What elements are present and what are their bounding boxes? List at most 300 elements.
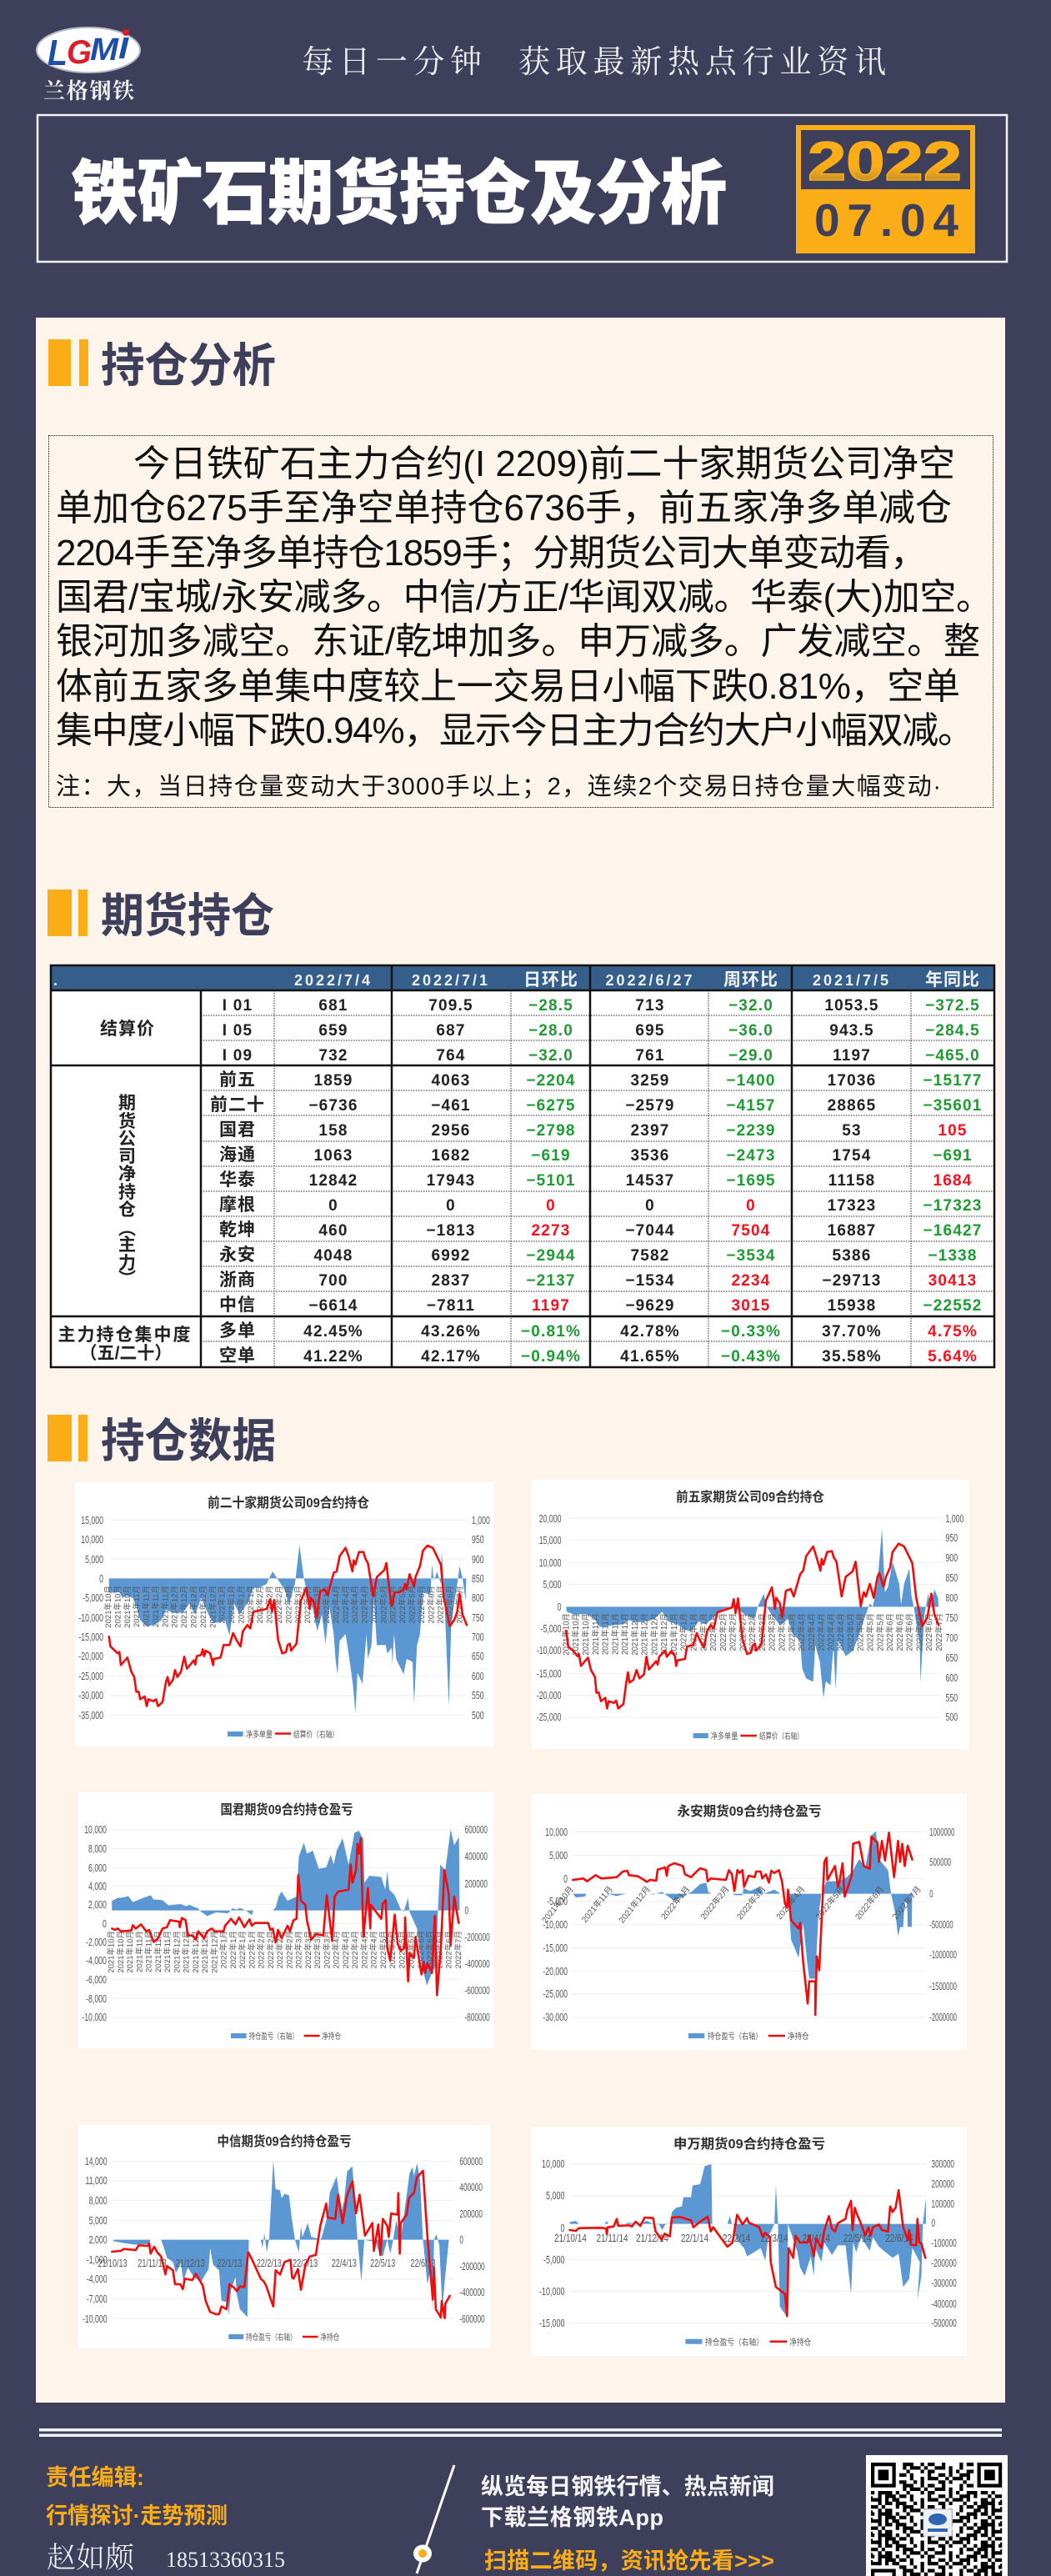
date axis labels: 22/6/13 [411,2258,435,2269]
date axis labels: 2021年12月 [649,1613,659,1656]
row 华泰: 11158 [828,1172,875,1190]
row 中信: 中信 [219,1296,256,1315]
row 乾坤 [219,1220,983,1240]
row 中信: −22552 [923,1297,983,1315]
date axis labels: 2022年5月 [813,1884,847,1922]
footer: app download text [481,2474,774,2573]
date axis labels: 2021年12月 [616,1884,653,1925]
right axis labels: 950 [472,1535,484,1546]
chart title: 永安期货09合约持仓盈亏 [677,1803,822,1819]
date axis labels: 2021年12月 [188,1586,198,1628]
date axis labels: 2021年12月 [200,1931,210,1973]
date axis labels: 2021年12月 [191,1931,201,1973]
table header: 2022/7/1 [412,972,490,989]
right axis labels: 750 [472,1613,484,1624]
row 空单: 35.58% [822,1348,882,1366]
left axis labels: 0 [563,1874,568,1885]
date badge [796,125,975,253]
row 多单: 43.26% [421,1323,481,1341]
left axis labels: -8,000 [86,1994,107,2005]
row 浙商: −1534 [625,1272,675,1290]
left axis labels: -10,000 [539,2287,565,2298]
right axis labels: 200000 [459,2208,483,2221]
row 空单: −0.43% [721,1348,781,1366]
left axis labels: 5,000 [89,2216,108,2227]
legend [685,2337,811,2348]
row I 09: 761 [635,1047,665,1065]
right axis labels: -2000000 [929,2012,957,2024]
date axis labels: 2022年5月 [398,1586,408,1623]
row 永安: −2944 [526,1247,576,1265]
legend [228,2332,339,2343]
footer: app download text: 下载兰格钢铁App [481,2505,663,2530]
date axis labels: 2022年4月 [836,1613,846,1651]
right axis labels [929,1827,957,2024]
left axis labels: -5,000 [543,2255,565,2266]
row 摩根: 0 [328,1197,338,1215]
right axis labels: 600000 [459,2156,483,2168]
logo: LGMI 兰格钢铁: 兰格钢铁 [43,74,134,105]
row I 09: −32.0 [528,1047,573,1065]
area: 持仓盈亏 [570,2164,926,2316]
legend [688,2031,809,2042]
date axis labels: 2021年12月 [209,1931,219,1973]
line: 净持仓 [112,2171,450,2318]
right axis labels: 400000 [459,2182,483,2194]
date axis labels: 2022年2月 [275,1931,285,1968]
date axis labels: 2022年3月 [293,1586,303,1623]
slogan [302,36,886,82]
right axis labels [932,2158,957,2330]
right axis labels: -200000 [459,2261,485,2273]
left axis labels: -10,000 [83,2314,108,2325]
left axis labels: 10,000 [81,1535,103,1546]
table header: 年同比 [925,970,980,990]
left axis labels: 10,000 [84,1825,107,1836]
row I 05: −36.0 [728,1022,773,1040]
table header: 2021/7/5 [813,972,891,989]
right axis labels: 500 [472,1711,484,1722]
right axis labels: 800 [945,1593,958,1604]
date axis labels: 2022年4月 [807,1613,817,1651]
left axis labels: -25,000 [78,1671,103,1682]
row 摩根: −17323 [923,1197,983,1215]
left axis labels: -20,000 [543,1967,568,1977]
legend [228,1729,338,1740]
row 多单: −0.33% [721,1323,781,1341]
area: 持仓盈亏 [112,1829,459,1986]
right axis labels [459,2156,485,2326]
date axis labels: 2022年1月 [227,1586,237,1623]
right axis labels: 800 [472,1593,484,1604]
date axis labels: 2022年4月 [826,1613,836,1651]
row 中信: 15938 [828,1297,876,1315]
left axis labels: -5,000 [547,1897,568,1907]
left axis labels: 2,000 [89,2235,108,2246]
left axis labels: -5,000 [541,1624,562,1635]
line: 结算价 [109,1546,467,1706]
date axis labels: 21/12/13 [176,2258,205,2269]
left axis labels: 5,000 [543,1580,562,1591]
date axis labels: 2022年3月 [322,1931,332,1968]
date axis labels: 2022年2月 [718,1613,728,1651]
row 乾坤: −16427 [923,1222,983,1240]
date axis labels: 2021年11月 [144,1931,154,1972]
date axis labels: 2022年4月 [797,1613,807,1651]
date axis labels: 2022年6月 [426,1586,436,1623]
row 乾坤: 2273 [531,1222,571,1240]
row 海通 [219,1145,973,1165]
date axis labels: 2022年3月 [777,1613,788,1651]
row I 09: I 09 [223,1047,253,1065]
left axis labels: -10,000 [78,1613,103,1624]
legend: 净持仓 [320,2332,339,2343]
row 永安: 7582 [630,1247,670,1265]
row 浙商 [219,1270,977,1290]
date axis labels: 22/4/13 [332,2258,357,2269]
row I 05: −284.5 [925,1022,980,1040]
left axis labels: 4,000 [88,1882,107,1892]
analysis text block [48,435,993,807]
logo: LGMI 兰格钢铁: L [48,33,68,73]
date axis labels: 2022年4月 [350,1931,360,1968]
date axis labels: 2022年6月 [435,1931,444,1968]
row 中信: −7811 [427,1297,475,1315]
date axis labels: 2022年6月 [445,1586,455,1623]
date axis labels: 2021年11月 [132,1586,142,1627]
date axis labels: 2021年10月 [539,1884,576,1925]
legend: 结算价（右轴） [293,1729,338,1740]
row I 01: 713 [635,997,665,1015]
footer: editor info [46,2465,285,2576]
left axis labels: -10,000 [537,1646,562,1656]
row I 05: 943.5 [829,1022,874,1040]
right axis labels: 850 [472,1574,484,1585]
date axis labels: 2022年3月 [758,1613,768,1651]
date axis labels: 22/2/13 [257,2258,282,2269]
row 国君: 53 [842,1122,862,1140]
date axis labels: 2022年6月 [416,1931,426,1968]
row 前五: 4063 [431,1072,471,1090]
date axis labels: 2022年4月 [341,1586,351,1623]
row 中信: −6614 [308,1297,358,1315]
date axis labels: 2022年2月 [738,1613,748,1651]
legend: 持仓盈亏（右轴） [246,2332,297,2343]
date axis labels: 22/5/14 [843,2233,871,2244]
row I 01: I 01 [223,997,253,1015]
left axis labels: -4,000 [86,1956,107,1967]
left axis labels: -35,000 [78,1711,103,1722]
row 乾坤: 乾坤 [219,1220,256,1240]
date axis labels: 2022年1月 [247,1931,257,1968]
row 摩根: 0 [446,1197,456,1215]
table header: . [53,972,60,989]
legend: 持仓盈亏（右轴） [708,2031,762,2042]
table header: 2022/7/4 [294,972,373,989]
row group label: 期货公司净持仓（主力）: 主 [118,1235,137,1255]
main title: 铁矿石期货持仓及分析 [72,154,727,233]
date axis labels: 2021年11月 [610,1613,620,1655]
row 华泰: 华泰 [219,1170,256,1190]
date axis labels: 2021年12月 [659,1613,669,1656]
analysis text block: 今日铁矿石主力合约(I 2209)前二十家期货公司净空 [133,444,955,484]
date axis labels: 2021年10月 [116,1931,126,1973]
right axis labels: -300000 [932,2278,957,2290]
row 浙商: 2234 [731,1272,771,1290]
analysis text block: 单加仓6275手至净空单持仓6736手，前五家净多单减仓 [56,488,952,529]
right axis labels: 1,000 [472,1516,490,1526]
table header: 周环比 [723,970,778,990]
row 永安: 4048 [313,1247,353,1265]
date axis labels: 2022年4月 [369,1586,379,1623]
right axis labels: -1000000 [929,1950,957,1962]
date badge: 07.04 [814,194,958,246]
left axis labels: -25,000 [543,1989,568,2000]
row 前二十: −6275 [526,1097,576,1115]
date axis labels: 21/11/14 [596,2233,628,2244]
row 前五: 1859 [313,1072,353,1090]
date axis labels: 2022年6月 [444,1931,454,1968]
right axis labels: 550 [472,1691,484,1701]
right axis labels: -200000 [932,2258,957,2270]
date axis labels: 2022年1月 [219,1931,229,1968]
row 空单: 41.65% [620,1348,680,1366]
left axis labels: -15,000 [537,1669,562,1680]
date axis labels [539,1884,923,1925]
legend: 净持仓 [322,2031,341,2042]
date axis labels: 2022年4月 [359,1931,369,1968]
date axis labels: 2022年5月 [388,1931,398,1968]
row 多单: −0.81% [521,1323,581,1341]
legend: 净持仓 [788,2031,809,2042]
date axis labels: 2022年1月 [708,1613,718,1651]
left axis labels: -15,000 [78,1632,103,1643]
row I 01 [223,997,980,1015]
left axis labels: -30,000 [543,2012,568,2023]
date axis labels: 2022年6月 [895,1613,905,1651]
row I 09 [223,1047,980,1065]
left axis labels: -20,000 [537,1691,562,1701]
date axis labels: 2022年2月 [283,1586,293,1623]
row group label: 主力持仓集中度 [58,1326,192,1363]
date axis labels: 22/3/14 [760,2233,788,2244]
area: 净多单量 [109,1545,466,1713]
date axis labels: 2022年2月 [265,1586,275,1623]
row 前二十: 28865 [828,1097,876,1115]
row group label: 期货公司净持仓（主力）: 持 [118,1183,137,1202]
left axis labels: 8,000 [88,1844,107,1855]
date axis labels: 2022年2月 [698,1884,732,1922]
date axis labels: 2022年1月 [218,1586,228,1623]
legend [693,1731,803,1742]
legend: 持仓盈亏（右轴） [705,2337,763,2348]
date axis labels [554,2233,913,2244]
analysis text block: 体前五家多单集中度较上一交易日小幅下跌0.81%，空单 [56,666,960,707]
row 浙商: −2137 [526,1272,576,1290]
row group label: 期货公司净持仓（主力）: ︶ [118,1270,137,1289]
date axis labels: 2022年4月 [817,1613,827,1651]
row 前二十: −461 [431,1097,471,1115]
row 多单: 多单 [219,1321,256,1341]
date axis labels: 22/1/13 [217,2258,242,2269]
date axis labels: 2022年6月 [436,1586,446,1623]
right axis labels: 600 [945,1673,958,1684]
row 空单 [219,1346,978,1366]
right axis labels: -200000 [465,1932,490,1944]
row 华泰: 17943 [427,1172,475,1190]
main cream panel [36,318,1005,2403]
date axis labels: 2022年6月 [924,1613,934,1651]
left axis labels: -10,000 [82,2012,107,2023]
icon: slash divider with dot [413,2465,454,2573]
left axis labels: -15,000 [543,1943,568,1954]
note: 注：大，当日持仓量变动大于3000手以上；2，连续2个交易日持仓量大幅变动· [56,773,941,800]
date axis labels: 2021年11月 [142,1586,152,1627]
date axis labels [107,1931,463,1973]
footer: editor info: 赵如颇 [47,2535,135,2576]
row 国君: 105 [938,1122,968,1140]
date axis labels: 2021年12月 [198,1586,208,1628]
row I 01: 1053.5 [824,997,879,1015]
date axis labels: 2021年11月 [620,1613,630,1655]
right axis labels: 1000000 [929,1827,955,1839]
row group label: 期货公司净持仓（主力）: 司 [118,1147,137,1166]
area: 持仓盈亏 [113,2161,449,2317]
right axis labels: 700 [472,1632,484,1643]
row group label: 主力持仓集中度: 主力持仓集中度 [58,1326,192,1345]
row 国君: 国君 [219,1120,256,1140]
date axis labels: 2022年3月 [313,1586,323,1623]
left axis labels [537,1514,562,1723]
date axis labels: 2021年11月 [163,1931,173,1972]
date axis labels: 2022年4月 [773,1884,808,1922]
date axis labels [98,2258,435,2269]
legend [231,2031,341,2042]
heading: 持仓数据: 持仓数据 [101,1415,276,1467]
date axis labels: 2022年5月 [407,1586,417,1623]
row 中信: 1197 [532,1297,570,1315]
right axis labels: 900 [472,1555,484,1566]
chart: 前二十家期货公司09合约持仓 [75,1482,493,1747]
row 多单: 37.70% [822,1323,882,1341]
icon: QR centre logo [923,2509,952,2536]
date axis labels: 2022年2月 [728,1613,738,1651]
futures positions table [51,965,994,1367]
logo: LGMI 兰格钢铁: M [90,33,119,68]
date axis labels: 22/4/14 [803,2233,830,2244]
date axis labels: 2022年2月 [255,1586,265,1623]
row 浙商: −29713 [822,1272,882,1290]
date axis labels: 2021年12月 [170,1586,180,1628]
title box [38,115,1007,262]
date axis labels: 2021年11月 [591,1613,601,1655]
heading: 持仓分析: 持仓分析 [101,339,276,392]
date axis labels: 2022年1月 [688,1613,699,1651]
left axis labels: 0 [103,1919,107,1930]
footer: editor info: 责任编辑: [46,2465,144,2490]
date axis labels: 2021年12月 [172,1931,182,1973]
row group label: 期货公司净持仓（主力）: 力 [118,1254,137,1273]
date axis labels: 2022年6月 [914,1613,924,1651]
date axis labels: 2022年2月 [257,1931,267,1968]
row 摩根: 17323 [828,1197,876,1215]
row group label: 期货公司净持仓（主力）: 净 [118,1165,137,1184]
row 海通: −2473 [726,1147,776,1165]
left axis labels: -7,000 [87,2294,108,2305]
left axis labels [82,1825,107,2023]
date axis labels: 2022年1月 [228,1931,238,1968]
right axis labels: 200000 [465,1878,488,1891]
row I 01: −372.5 [925,997,980,1015]
date axis labels: 2022年5月 [397,1931,407,1968]
legend: 结算价（右轴） [759,1731,803,1742]
left axis labels: -30,000 [78,1691,103,1701]
row 华泰: −5101 [526,1172,576,1190]
left axis labels: 0 [558,1602,562,1613]
right axis labels: 900 [945,1553,958,1564]
date axis labels: 2022年3月 [303,1586,313,1623]
right axis labels: 0 [465,1905,468,1917]
date axis labels: 2022年5月 [875,1613,885,1651]
date axis labels: 2022年6月 [853,1884,886,1922]
date axis labels: 2022年3月 [303,1931,313,1968]
date axis labels: 2022年5月 [388,1586,398,1623]
footer: app download text: 扫描二维码，资讯抢先看>>> [484,2548,774,2573]
left axis labels [78,1516,103,1722]
date axis labels [561,1613,944,1656]
row I 09: −465.0 [925,1047,980,1065]
row 前五: 前五 [219,1070,256,1090]
QR code [866,2455,1008,2576]
row 国君: 2956 [431,1122,471,1140]
right axis labels: -400000 [459,2287,485,2299]
row 浙商: 30413 [928,1272,977,1290]
right axis labels: 650 [472,1651,484,1662]
row 前二十: −6736 [308,1097,358,1115]
row 乾坤: 460 [318,1222,348,1240]
row 国君: −2798 [526,1122,576,1140]
date axis labels: 2022年5月 [856,1613,866,1651]
line: 净持仓 [112,1838,458,1995]
date axis labels: 2022年5月 [865,1613,876,1651]
row group label: 期货公司净持仓（主力）: 货 [118,1111,137,1131]
row 空单: 5.64% [928,1348,978,1366]
row 乾坤: 7504 [731,1222,771,1240]
row group label: 期货公司净持仓（主力）: 公 [118,1130,137,1149]
row 多单 [219,1321,978,1341]
row 前二十 [210,1095,983,1115]
row group label: 期货公司净持仓（主力）: 仓 [118,1200,137,1220]
row I 05 [223,1022,980,1040]
left axis labels [539,2159,565,2329]
date axis labels: 2022年6月 [425,1931,435,1968]
date axis labels: 2022年1月 [246,1586,256,1623]
row 前五 [219,1070,983,1090]
left axis labels: 15,000 [539,1536,562,1546]
logo: LGMI 兰格钢铁: G [67,34,92,71]
row group label: 期货公司净持仓（主力）: 期 [118,1094,137,1113]
date axis labels: 2021年11月 [160,1586,170,1627]
date axis labels: 2022年7月 [890,1884,923,1922]
row 空单: 空单 [219,1346,256,1366]
left axis labels: -4,000 [87,2274,108,2285]
date axis labels: 2021年10月 [103,1586,113,1628]
row 空单: 42.17% [421,1348,481,1366]
row 摩根 [219,1195,983,1215]
row 前二十: −2579 [625,1097,675,1115]
right axis labels: 850 [945,1573,958,1584]
left axis labels: 20,000 [539,1514,562,1525]
